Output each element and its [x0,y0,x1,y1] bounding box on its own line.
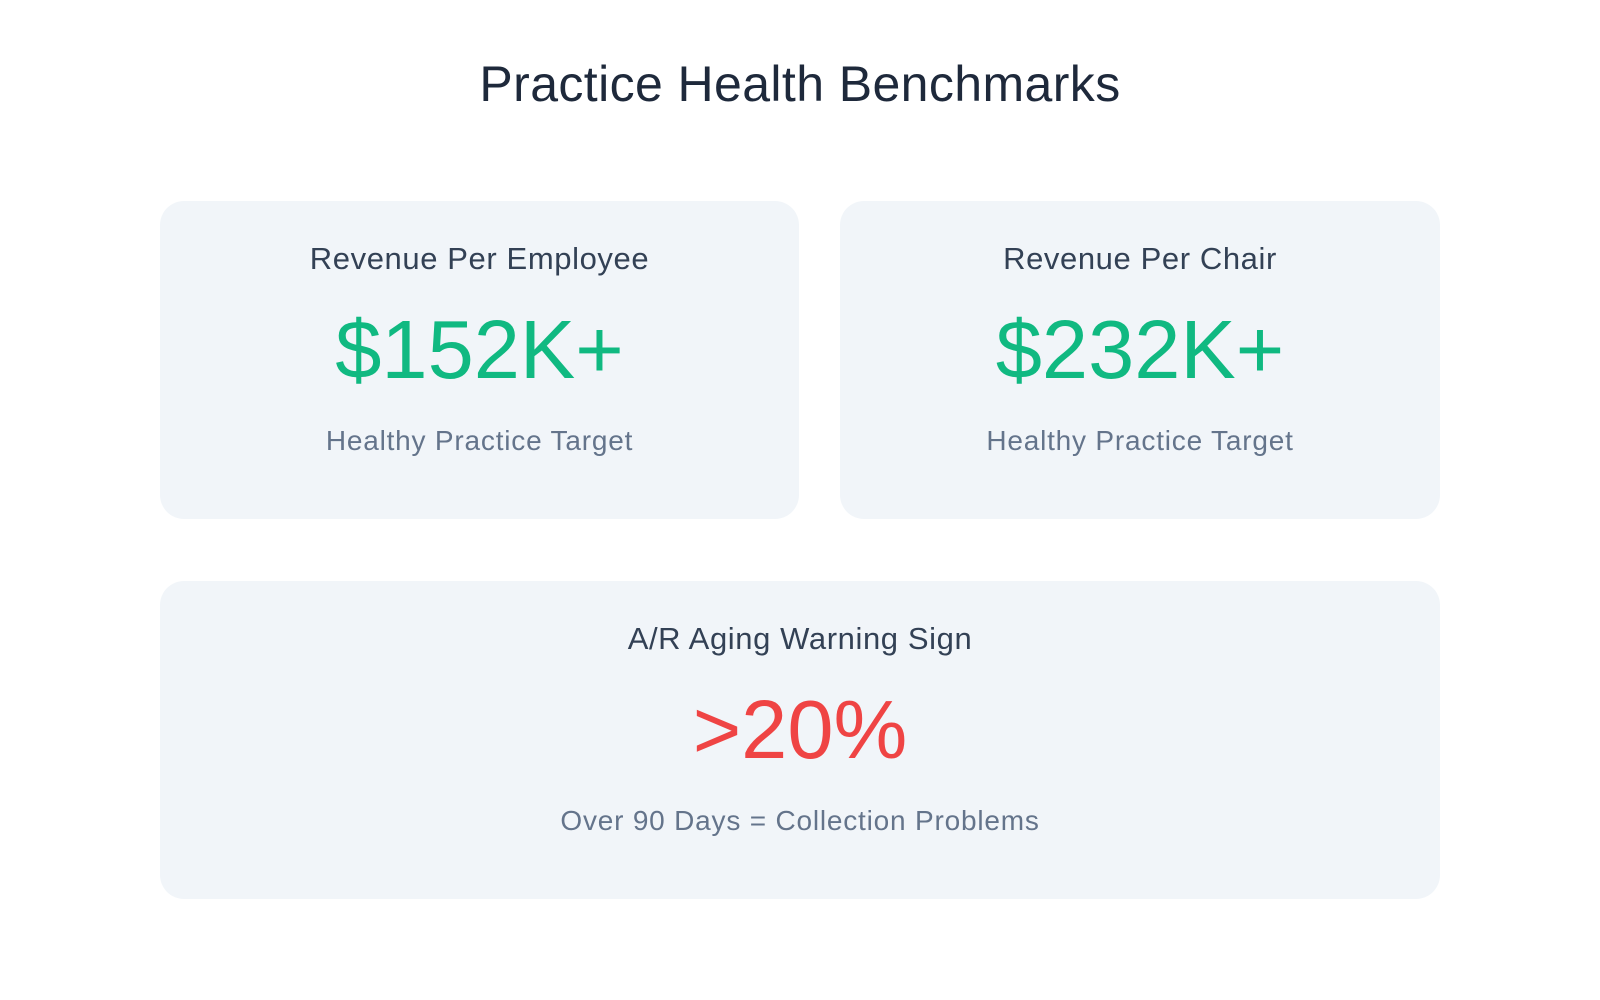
title: Practice Health Benchmarks [479,56,1121,112]
panel: revenue per chair [840,201,1440,519]
value: >20% [693,683,907,776]
subtitle: Healthy Practice Target [986,425,1294,456]
label: Revenue Per Chair [1003,241,1277,276]
panel: revenue per employee [160,201,799,519]
value: $232K+ [996,303,1284,396]
subtitle: Healthy Practice Target [326,425,633,456]
label: A/R Aging Warning Sign [628,621,972,656]
value: $152K+ [335,303,624,396]
panel: A/R aging [160,581,1440,899]
subtitle: Over 90 Days = Collection Problems [560,805,1040,836]
label: Revenue Per Employee [310,241,649,276]
